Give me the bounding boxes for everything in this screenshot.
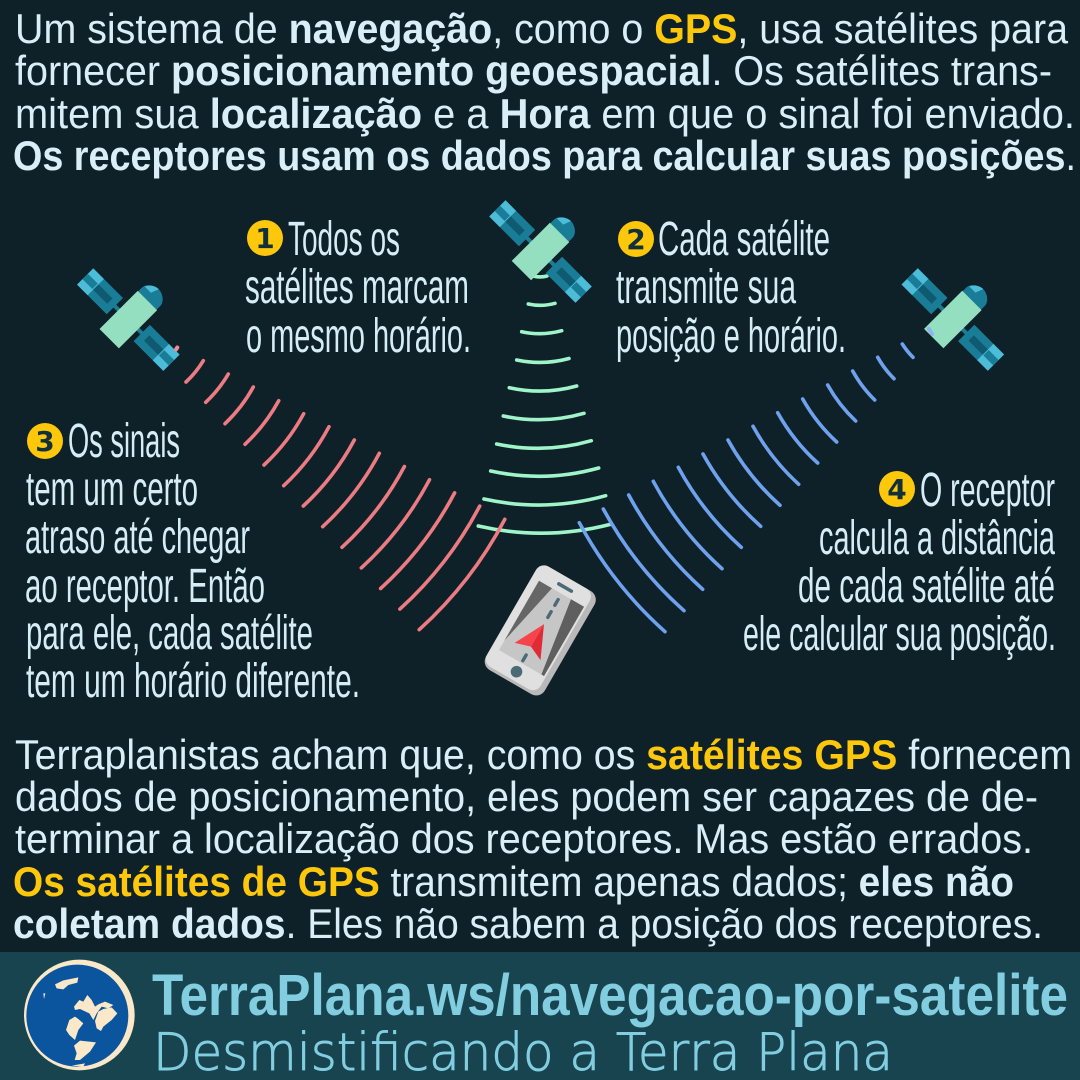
signal waves: red from left satellite <box>186 361 505 630</box>
intro paragraph: fornecer posicionamento geoespacial. Os satélites trans- <box>15 47 1052 94</box>
icon: left satellite <box>66 246 202 382</box>
callout 2: transmits position <box>616 213 846 363</box>
callout 3: signal delay: atraso até chegar <box>25 511 250 564</box>
callout 1: same time: 1 <box>255 222 275 255</box>
callout 3: signal delay: tem um certo <box>26 463 198 516</box>
closing paragraph: Os satélites de GPS transmitem apenas dados; eles não <box>13 858 1014 905</box>
callout 3: signal delay: ao receptor. Então <box>25 560 265 613</box>
callout 3: signal delay: para ele, cada satélite <box>26 607 313 660</box>
callout 3: signal delay: Os sinais <box>68 415 180 468</box>
callout 4: receiver calculates: 4 <box>887 473 907 506</box>
callout 2: transmits position: transmite sua <box>616 261 796 314</box>
callout 1: same time <box>245 213 471 363</box>
closing paragraph: terminar a localização dos receptores. Mas estão errados. <box>15 815 1033 862</box>
callout 2: transmits position: Cada satélite <box>658 213 830 266</box>
closing paragraph: coletam dados. Eles não sabem a posição dos receptores. <box>13 900 1043 947</box>
wave remnant on left satellite <box>176 348 177 350</box>
callout 3: signal delay <box>25 415 360 708</box>
wave remnant on right satellite <box>929 329 932 334</box>
callout 2: transmits position: posição e horário. <box>616 310 846 363</box>
intro paragraph <box>13 5 1076 179</box>
icon: smartphone with navigation arrow <box>481 562 599 699</box>
callout 1: same time: Todos os <box>288 213 400 266</box>
footer band <box>0 952 1080 1080</box>
closing paragraph: Terraplanistas acham que, como os satélites GPS fornecem <box>15 731 1072 778</box>
closing paragraph: dados de posicionamento, eles podem ser capazes de de- <box>15 773 1038 820</box>
callout 4: receiver calculates <box>743 464 1056 661</box>
icon: flat earth globe logo <box>24 960 135 1070</box>
callout 3: signal delay: tem um horário diferente. <box>26 655 360 708</box>
icon: centre satellite <box>478 178 614 314</box>
closing paragraph <box>13 731 1072 947</box>
icon: right satellite <box>891 246 1026 382</box>
signal waves: green from centre satellite <box>478 276 612 533</box>
callout 1: same time: satélites marcam <box>245 261 469 314</box>
callout 1: same time: o mesmo horário. <box>246 310 471 363</box>
intro paragraph: Um sistema de navegação, como o GPS, usa satélites para <box>15 5 1069 52</box>
intro paragraph: mitem sua localização e a Hora em que o sinal foi enviado. <box>15 90 1075 137</box>
callout 3: signal delay: 3 <box>35 425 55 458</box>
callout 2: transmits position: 2 <box>626 223 646 256</box>
signal waves: blue from right satellite <box>579 344 913 632</box>
